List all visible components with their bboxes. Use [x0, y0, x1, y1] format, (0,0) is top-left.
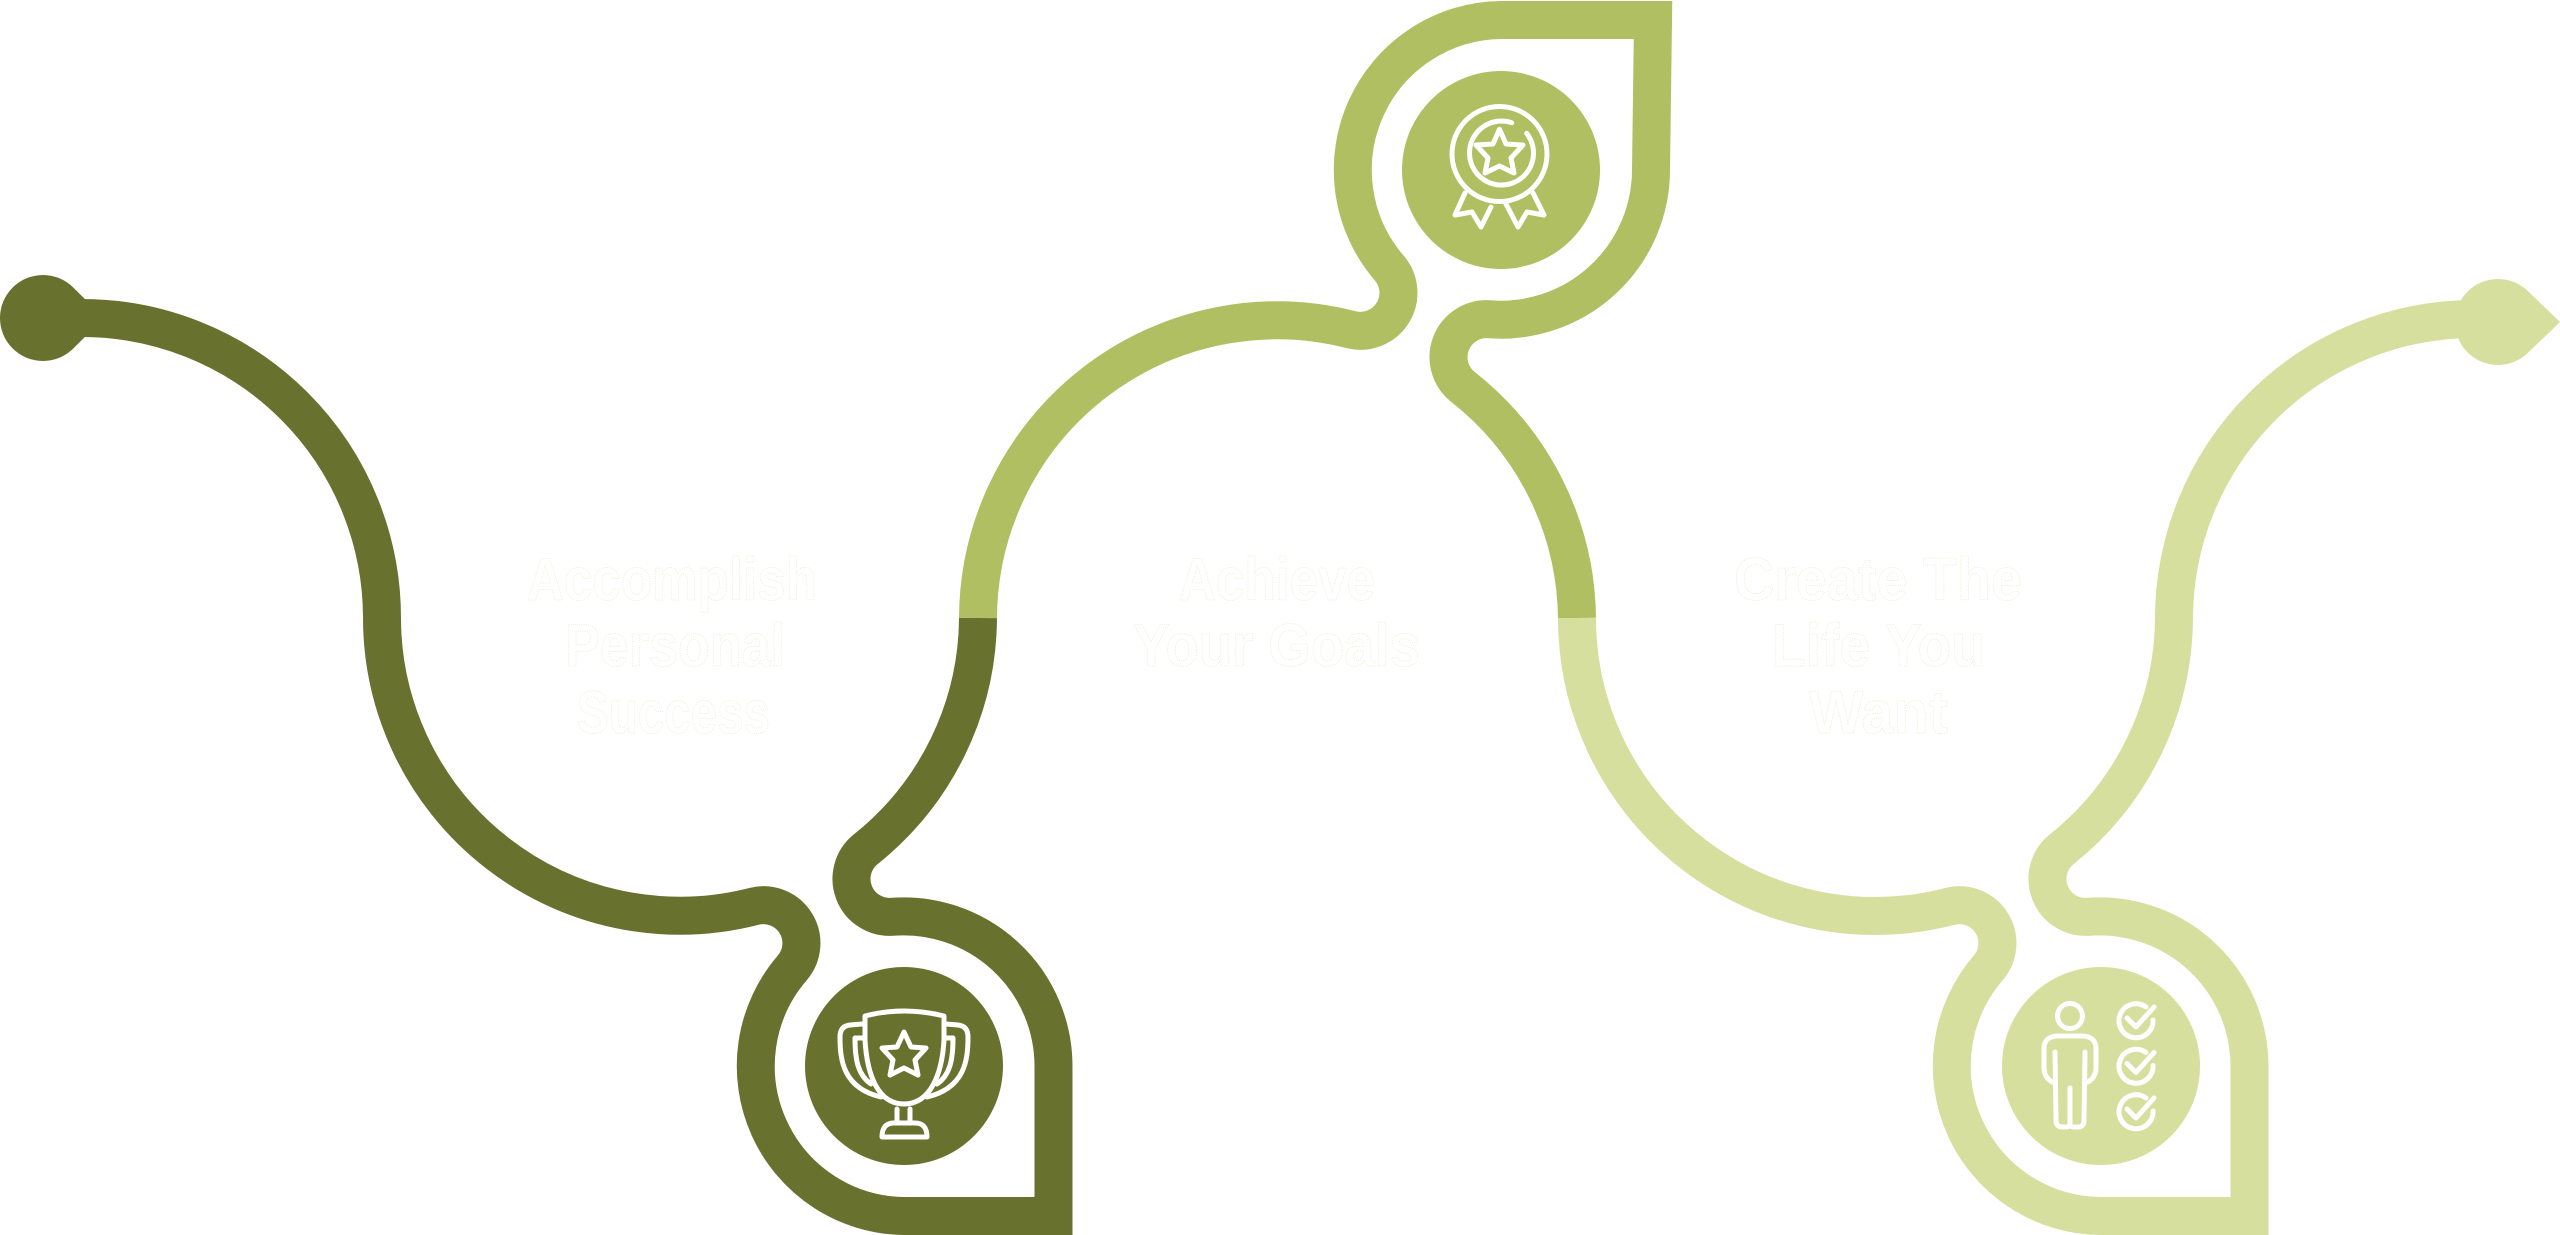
- heading: Accomplish Personal Success: Accomplish: [527, 546, 817, 613]
- heading: Achieve Your Goals: Achieve: [1179, 546, 1375, 613]
- heading: Create The Life You Want: Want: [1809, 679, 1948, 746]
- heading: Create The Life You Want: Create The: [1734, 546, 2022, 613]
- icon: trophy: [805, 967, 1003, 1165]
- heading: Achieve Your Goals: [1133, 546, 1420, 679]
- heading: Accomplish Personal Success: [527, 546, 817, 746]
- path segment: step 1 dark olive: [0, 275, 1054, 1216]
- heading: Achieve Your Goals: Your Goals: [1133, 612, 1420, 679]
- icon: person with checklist: [2002, 967, 2200, 1165]
- icon: medal with ribbon: [1402, 71, 1600, 269]
- heading: Create The Life You Want: [1734, 546, 2022, 746]
- heading: Create The Life You Want: Life You: [1772, 612, 1985, 679]
- heading: Accomplish Personal Success: Personal: [565, 612, 785, 679]
- path segment: step 3 light green: [1577, 279, 2560, 1216]
- heading: Accomplish Personal Success: Success: [577, 679, 770, 746]
- path segment: step 2 mid green: [978, 20, 1653, 618]
